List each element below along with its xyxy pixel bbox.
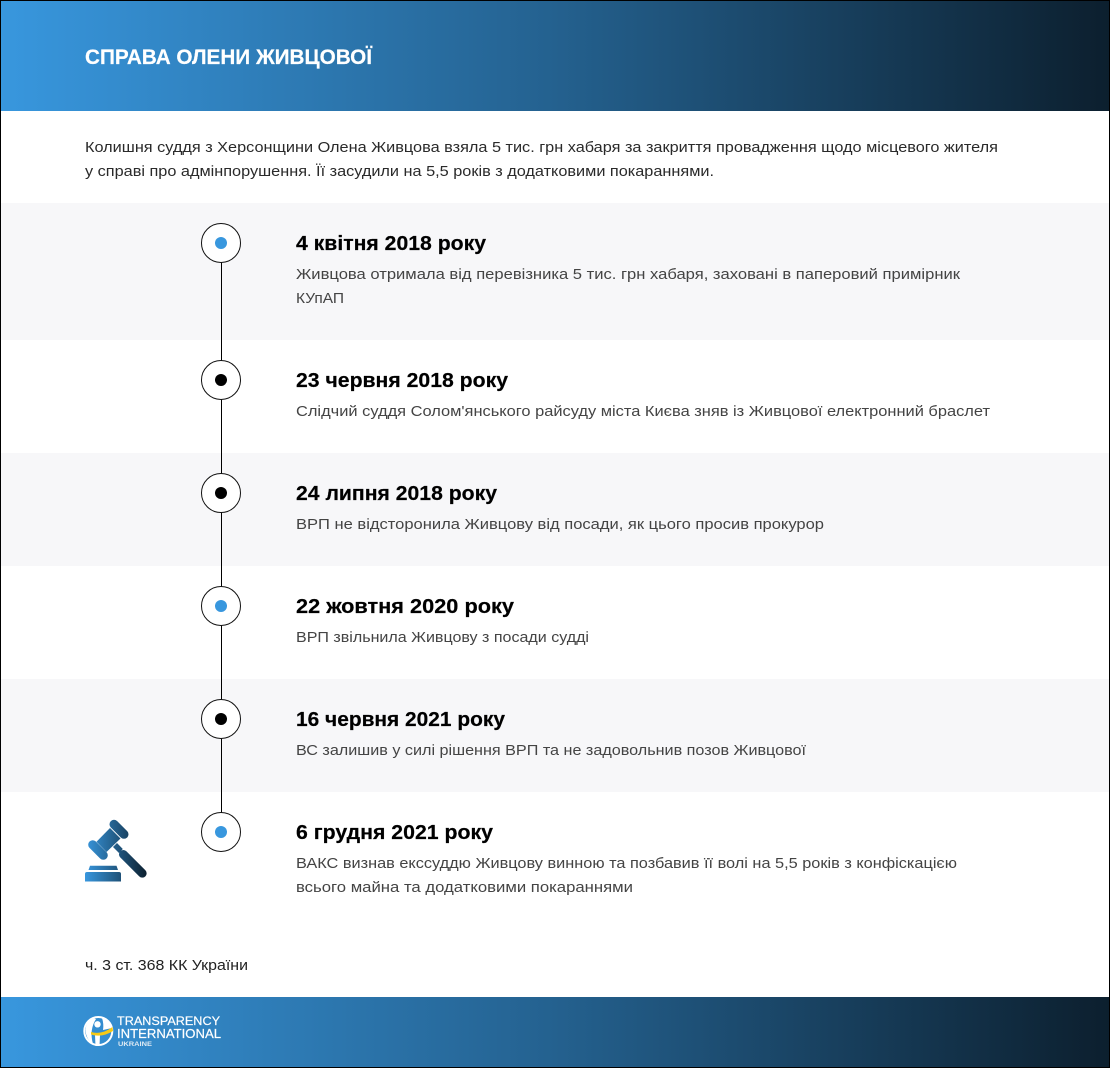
row backgrounds: [0, 203, 1110, 792]
event: 4 April 2018: Живцова отримала від перевізника 5 тис. грн хабаря, заховані в паперовий примірник: [296, 266, 960, 283]
event: 6 December 2021: всього майна та додатковими покараннями: [296, 879, 633, 896]
intro text: [85, 139, 998, 180]
event: 22 October 2020: 22 жовтня 2020 року: [296, 596, 515, 618]
event: 23 June 2018: [202, 360, 990, 420]
intro text: Колишня суддя з Херсонщини Олена Живцова взяла 5 тис. грн хабаря за закриття провадження щодо місцевого жителя: [85, 139, 998, 156]
event: 16 June 2021: [202, 700, 807, 759]
header banner: [0, 0, 1110, 111]
event: 22 October 2020: [202, 586, 589, 646]
footer banner: [0, 997, 1110, 1068]
title: СПРАВА ОЛЕНИ ЖИВЦОВОЇ: [85, 45, 373, 69]
icon: gavel: [85, 824, 142, 882]
event: 4 April 2018: [202, 224, 960, 307]
logo: Transparency International Ukraine: INTERNATIONAL: [117, 1026, 221, 1041]
event: 4 April 2018: КУпАП: [296, 290, 344, 307]
event: 6 December 2021: 6 грудня 2021 року: [296, 822, 494, 844]
event: 6 December 2021: ВАКС визнав екссуддю Живцову винною та позбавив її волі на 5,5 років з конфіскацією: [296, 855, 957, 872]
event: 24 July 2018: 24 липня 2018 року: [296, 483, 498, 505]
event: 23 June 2018: 23 червня 2018 року: [296, 370, 509, 392]
event: 22 October 2020: ВРП звільнила Живцову з посади судді: [296, 629, 589, 646]
event: 16 June 2021: ВС залишив у силі рішення ВРП та не задовольнив позов Живцової: [296, 742, 807, 759]
logo: Transparency International Ukraine: UKRAINE: [118, 1041, 153, 1048]
event: 6 December 2021: [202, 812, 957, 896]
event: 16 June 2021: 16 червня 2021 року: [296, 709, 506, 731]
intro text: у справі про адмінпорушення. Її засудили на 5,5 років з додатковими покараннями.: [85, 163, 714, 180]
logo: Transparency International Ukraine: TRANSPARENCY: [117, 1014, 220, 1028]
event: 24 July 2018: [202, 474, 824, 533]
source note: ч. 3 ст. 368 КК України: [85, 958, 248, 974]
event: 4 April 2018: 4 квітня 2018 року: [296, 233, 487, 255]
logo: Transparency International Ukraine: [84, 1014, 221, 1048]
event: 23 June 2018: Слідчий суддя Солом'янського райсуду міста Києва зняв із Живцової електронний браслет: [296, 403, 990, 420]
event: 24 July 2018: ВРП не відсторонила Живцову від посади, як цього просив прокурор: [296, 516, 824, 533]
timeline line: [220, 243, 222, 832]
